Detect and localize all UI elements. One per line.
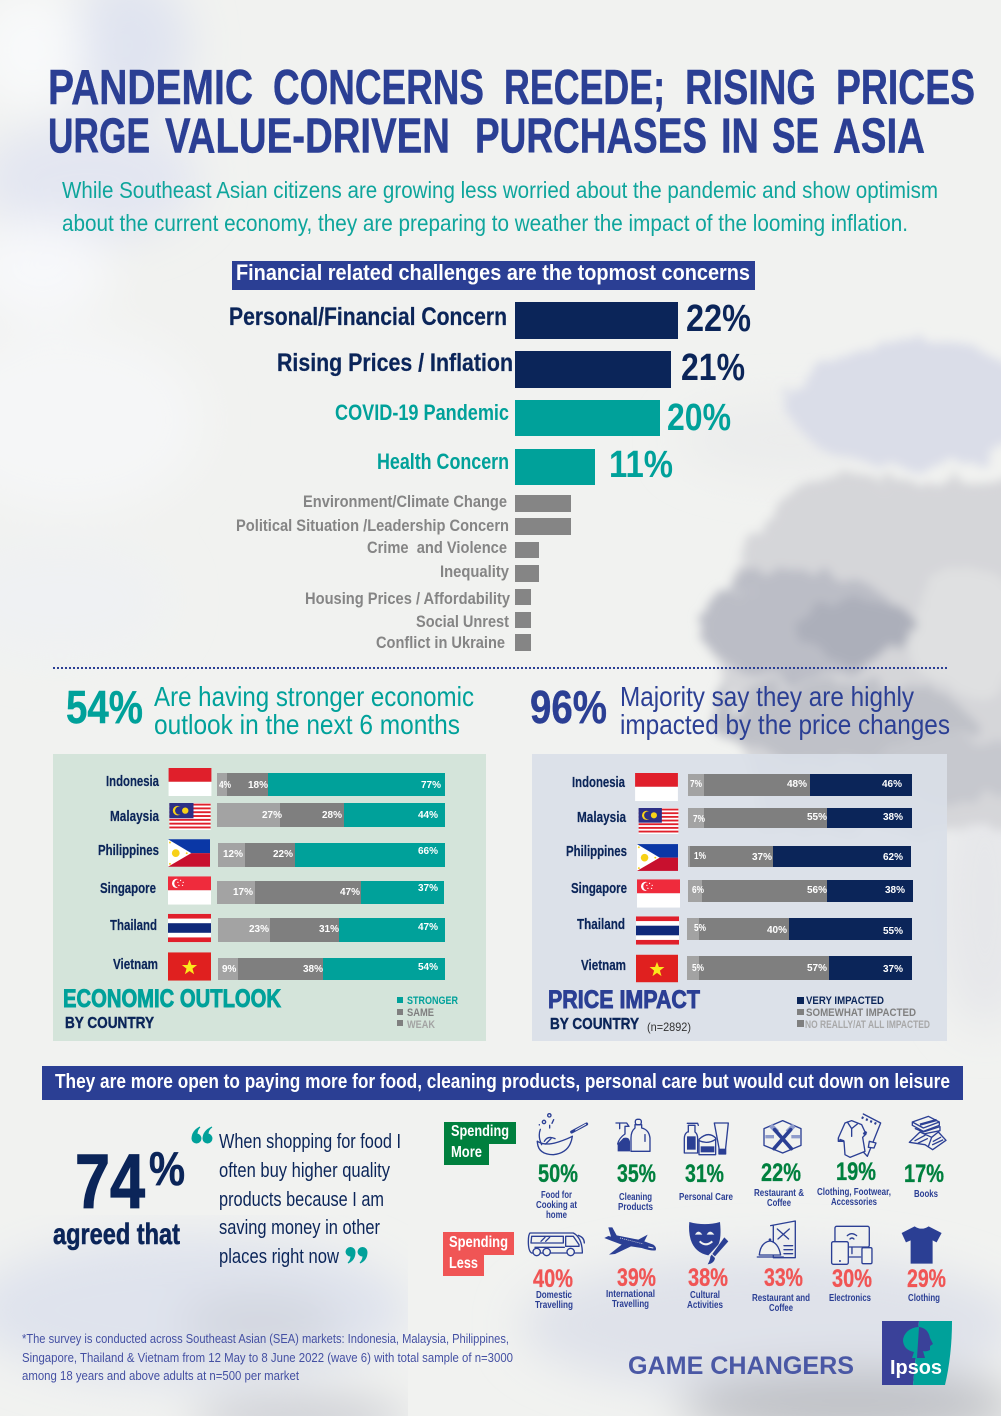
minor concerns: Conflict in Ukraine: [376, 633, 505, 652]
value: clothing: Clothing: [908, 1293, 940, 1304]
heading banner: spending: [42, 1066, 963, 1100]
row: Malaysia: [577, 808, 912, 834]
row: Vietnam: 57%: [807, 963, 827, 974]
row: Singapore: [571, 879, 913, 908]
panel: price impact: [532, 754, 947, 1041]
row: Singapore: 37%: [418, 883, 438, 894]
minor concerns: Environment/Climate Change: [303, 492, 507, 511]
title: IN: [721, 110, 759, 164]
legend: SOMEWHAT IMPACTED: [806, 1007, 916, 1019]
row: Philippines: 1%: [694, 851, 706, 862]
value: clothing: [907, 1265, 946, 1304]
quote: When shopping for food I: [219, 1131, 401, 1153]
row: Malaysia: Malaysia: [577, 809, 627, 826]
row: Indonesia: 7%: [690, 779, 702, 790]
icon: opening quote mark: [192, 1127, 212, 1143]
row: Philippines: 66%: [418, 846, 438, 857]
bar: covid-19 20%: COVID-19 Pandemic: [335, 400, 509, 425]
stat: 74% agreed: agreed that: [53, 1218, 180, 1251]
title: ASIA: [833, 110, 925, 164]
icon: wok: [537, 1114, 587, 1155]
value: cleaning products: Products: [618, 1202, 653, 1213]
minor concerns: Housing Prices / Affordability: [305, 589, 510, 608]
value: restaurant and coffee: Coffee: [767, 1198, 791, 1209]
panel title: [63, 985, 281, 1032]
minor concerns: [236, 492, 571, 652]
icon: closing quote mark: [346, 1248, 367, 1263]
icon: bus: [528, 1233, 584, 1256]
value: domestic travelling: Travelling: [535, 1300, 573, 1311]
legend: STRONGER: [407, 995, 458, 1007]
footnote: among 18 years and above adults at n=500 per market: [22, 1369, 299, 1383]
value: cleaning products: 35%: [617, 1160, 656, 1188]
value: cultural activities: Activities: [687, 1300, 723, 1311]
row: Malaysia: [110, 803, 445, 830]
value: cultural activities: [687, 1264, 728, 1311]
row: Vietnam: 9%: [222, 964, 237, 975]
title: CONCERNS: [273, 61, 484, 115]
value: personal care: [679, 1160, 733, 1203]
stat: 74% agreed: [53, 1139, 185, 1251]
row: Thailand: 40%: [767, 925, 787, 936]
icon: restaurant menu and cloche: [757, 1221, 795, 1258]
value: books: 17%: [904, 1160, 944, 1188]
value: personal care: 31%: [685, 1160, 724, 1188]
tag: spending less: Spending: [449, 1234, 508, 1251]
row: Singapore: 56%: [807, 885, 827, 896]
row: Thailand: [577, 916, 912, 945]
minor concerns: Political Situation /Leadership Concern: [236, 516, 509, 535]
value: restaurant and coffee: [752, 1264, 810, 1314]
row: Malaysia: Malaysia: [110, 808, 160, 825]
row: Vietnam: [581, 955, 912, 982]
value: clothing, footwear, accessories: Accessories: [831, 1197, 877, 1208]
value: cleaning products: [617, 1160, 656, 1213]
stat: 96% highly impacted: 96%: [530, 681, 607, 733]
tag: spending less: [443, 1232, 514, 1276]
minor concerns: Social Unrest: [416, 612, 509, 631]
value: restaurant and coffee: Restaurant &: [754, 1188, 804, 1199]
bar: health concern 11%: 11%: [609, 444, 673, 486]
logo: Ipsos: [882, 1321, 952, 1385]
value: personal care: Personal Care: [679, 1192, 733, 1203]
row: Thailand: 47%: [418, 922, 438, 933]
value: clothing, footwear, accessories: [817, 1158, 891, 1208]
row: Indonesia: Indonesia: [106, 773, 159, 790]
row: Vietnam: [113, 952, 445, 981]
row: Indonesia: 4%: [219, 780, 231, 791]
value: electronics: [829, 1265, 872, 1304]
bar: covid-19 20%: 20%: [667, 397, 731, 439]
row: Philippines: Philippines: [98, 842, 159, 859]
tag: spending more: [444, 1122, 516, 1165]
value: clothing, footwear, accessories: Clothing, Footwear,: [817, 1187, 891, 1198]
stat: 74% agreed: %: [149, 1142, 185, 1195]
row: Philippines: 12%: [223, 849, 243, 860]
bar: health concern 11%: Health Concern: [377, 449, 509, 474]
row: Singapore: 38%: [885, 885, 905, 896]
subtitle: [62, 177, 938, 236]
icon: electronics: [832, 1226, 872, 1264]
row: Malaysia: 7%: [693, 814, 705, 825]
row: Thailand: 31%: [319, 924, 339, 935]
stat: 96% highly impacted: [530, 681, 950, 740]
row: Philippines: 22%: [273, 849, 293, 860]
row: Indonesia: Indonesia: [572, 774, 625, 791]
value: food for cooking: Food for: [541, 1190, 572, 1201]
bar: rising prices 21%: 21%: [681, 347, 745, 389]
legend: [397, 995, 458, 1031]
footnote: Singapore, Thailand & Vietnam from 12 May to 8 June 2022 (wave 6) with total sample of n=3000: [22, 1351, 513, 1365]
row: Singapore: 47%: [340, 887, 360, 898]
value: electronics: 30%: [832, 1265, 872, 1293]
legend: NO REALLY/AT ALL IMPACTED: [805, 1019, 930, 1031]
row: Thailand: 23%: [249, 924, 269, 935]
panel title: PRICE IMPACT: [548, 986, 700, 1014]
icon: restaurant and coffee: [764, 1121, 801, 1153]
icon: clothing, footwear, accessories: [838, 1114, 881, 1157]
title: SE: [772, 110, 819, 164]
row: Thailand: 55%: [883, 926, 903, 937]
quote: often buy higher quality: [219, 1160, 390, 1182]
row: Singapore: 6%: [692, 885, 704, 896]
value: food for cooking: 50%: [538, 1160, 578, 1188]
value: international travelling: International: [606, 1289, 655, 1300]
row: Indonesia: 46%: [882, 779, 902, 790]
bar: covid-19 20%: [335, 397, 731, 439]
row: Philippines: 37%: [752, 852, 772, 863]
row: Indonesia: [572, 773, 912, 801]
row: Thailand: Thailand: [577, 916, 625, 933]
stat: 54% stronger outlook: outlook in the next 6 months: [154, 709, 460, 740]
stat: 54% stronger outlook: [66, 681, 474, 740]
row: Singapore: 17%: [233, 887, 253, 898]
title: [48, 61, 975, 164]
legend: [797, 995, 930, 1031]
spending more items: [536, 1114, 946, 1221]
row: Thailand: Thailand: [110, 917, 157, 934]
stat: 54% stronger outlook: Are having stronger economic: [154, 681, 474, 712]
legend: SAME: [407, 1007, 434, 1019]
row: Indonesia: [106, 768, 445, 796]
title: VALUE-DRIVEN: [165, 110, 450, 164]
value: books: [904, 1160, 944, 1200]
icon: books: [909, 1116, 946, 1150]
icon: cleaning products: [616, 1119, 650, 1151]
value: international travelling: Travelling: [612, 1299, 649, 1310]
panel title: ECONOMIC OUTLOOK: [63, 985, 281, 1013]
bar: rising prices 21%: [277, 347, 745, 389]
heading banner: financial challenges: Financial related challenges are the topmost concerns: [236, 260, 750, 285]
row: Indonesia: 48%: [787, 779, 807, 790]
row: Vietnam: Vietnam: [113, 956, 158, 973]
bar: personal/financial concern 22%: 22%: [686, 298, 751, 340]
value: clothing, footwear, accessories: 19%: [836, 1158, 876, 1186]
row: Malaysia: 27%: [262, 810, 282, 821]
row: Vietnam: 54%: [418, 962, 438, 973]
game changers wordmark: GAME CHANGERS: [628, 1352, 854, 1380]
bar: personal/financial concern 22%: [229, 298, 751, 340]
row: Vietnam: 5%: [692, 963, 704, 974]
title: URGE: [48, 110, 150, 164]
value: restaurant and coffee: 33%: [764, 1264, 803, 1292]
value: domestic travelling: [533, 1265, 573, 1311]
panel title: [548, 986, 700, 1034]
value: international travelling: [606, 1264, 656, 1310]
value: restaurant and coffee: Restaurant and: [752, 1293, 810, 1304]
row: Philippines: [98, 839, 445, 867]
row: Singapore: [100, 876, 444, 905]
logo: Ipsos: Ipsos: [890, 1357, 942, 1379]
row: Thailand: 5%: [694, 923, 706, 934]
row: Malaysia: 38%: [883, 812, 903, 823]
value: food for cooking: home: [546, 1210, 567, 1221]
value: restaurant and coffee: [754, 1159, 804, 1209]
legend: VERY IMPACTED: [806, 995, 884, 1007]
title: RECEDE;: [504, 61, 665, 115]
title: PANDEMIC: [48, 61, 253, 115]
value: food for cooking: Cooking at: [536, 1200, 578, 1211]
row: Malaysia: 28%: [322, 810, 342, 821]
value: domestic travelling: 40%: [533, 1265, 573, 1293]
value: restaurant and coffee: 22%: [761, 1159, 801, 1187]
row: Malaysia: 44%: [418, 810, 438, 821]
title: PURCHASES: [475, 110, 707, 164]
row: Vietnam: 37%: [883, 964, 903, 975]
value: cleaning products: Cleaning: [619, 1192, 652, 1203]
tag: spending more: More: [451, 1144, 482, 1161]
tag: spending more: Spending: [451, 1123, 509, 1140]
value: international travelling: 39%: [617, 1264, 656, 1292]
stat: 74% agreed: 74: [75, 1139, 145, 1225]
panel title: (n=2892): [647, 1020, 691, 1034]
footnote: *The survey is conducted across Southeast Asian (SEA) markets: Indonesia, Malaysia, Philippines,: [22, 1332, 509, 1346]
legend: WEAK: [407, 1019, 435, 1031]
row: Singapore: Singapore: [571, 880, 627, 897]
quote: places right now: [219, 1246, 339, 1268]
value: food for cooking: [536, 1160, 578, 1221]
bar chart: topmost concerns: [229, 298, 751, 652]
icon: cultural activities: [689, 1222, 728, 1264]
quote: [192, 1127, 401, 1268]
tag: spending less: Less: [449, 1255, 478, 1272]
panel title: BY COUNTRY: [550, 1016, 639, 1033]
stat: 96% highly impacted: impacted by the price changes: [620, 709, 950, 740]
spending less items: [528, 1221, 946, 1314]
value: books: Books: [914, 1189, 938, 1200]
minor concerns: Crime and Violence: [367, 538, 507, 557]
row: Vietnam: Vietnam: [581, 957, 626, 974]
quote: saving money in other: [219, 1217, 380, 1239]
footnote: [22, 1332, 513, 1383]
bar: rising prices 21%: Rising Prices / Inflation: [277, 349, 513, 377]
icon: t-shirt: [902, 1226, 942, 1264]
row: Singapore: Singapore: [100, 880, 156, 897]
value: domestic travelling: Domestic: [536, 1290, 572, 1301]
icon: plane: [604, 1227, 656, 1255]
row: Philippines: Philippines: [566, 843, 627, 860]
panel title: BY COUNTRY: [65, 1015, 154, 1032]
value: electronics: Electronics: [829, 1293, 871, 1304]
row: Philippines: 62%: [883, 852, 903, 863]
row: Indonesia: 77%: [421, 780, 441, 791]
stat: 96% highly impacted: Majority say they are highly: [620, 681, 914, 712]
row: Malaysia: 55%: [807, 812, 827, 823]
value: cultural activities: Cultural: [690, 1290, 720, 1301]
panel: economic outlook: [53, 754, 486, 1041]
stat: 54% stronger outlook: 54%: [66, 681, 143, 733]
bar: personal/financial concern 22%: Personal/Financial Concern: [229, 303, 507, 331]
minor concerns: Inequality: [440, 562, 509, 581]
bar: health concern 11%: [377, 444, 673, 486]
row: Thailand: [110, 914, 445, 942]
row: Philippines: [566, 843, 911, 871]
icon: personal care: [684, 1123, 728, 1155]
value: restaurant and coffee: Coffee: [769, 1303, 793, 1314]
value: cultural activities: 38%: [688, 1264, 728, 1292]
subtitle: about the current economy, they are preparing to weather the impact of the looming inflation.: [62, 210, 908, 236]
title: RISING: [685, 61, 816, 115]
value: clothing: 29%: [907, 1265, 946, 1293]
row: Vietnam: 38%: [303, 964, 323, 975]
row: Indonesia: 18%: [248, 780, 268, 791]
quote: products because I am: [219, 1189, 384, 1211]
